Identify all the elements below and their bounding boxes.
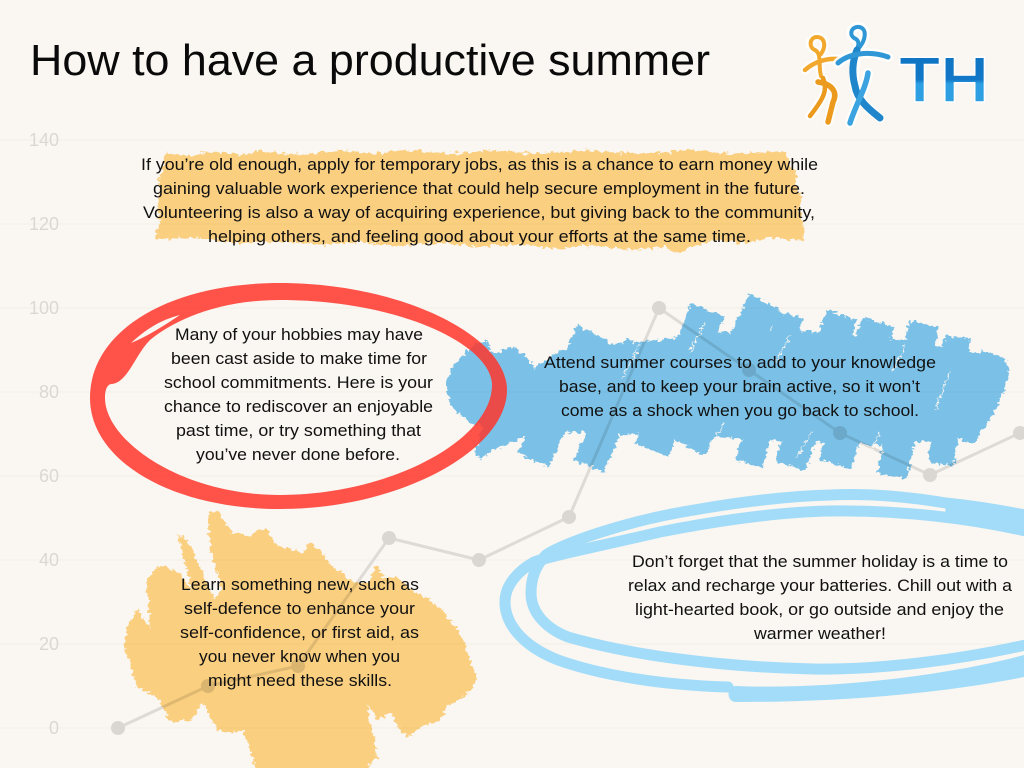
- light blue hand-drawn loops: [505, 494, 1024, 702]
- text: self-defence to enhance your: [184, 599, 415, 618]
- text: base, and to keep your brain active, so it won’t: [559, 377, 920, 396]
- logo letters TH: TH: [899, 43, 989, 116]
- text: Volunteering is also a way of acquiring experience, but giving back to the community,: [143, 203, 815, 222]
- text: gaining valuable work experience that could help secure employment in the future.: [153, 179, 805, 198]
- text: [628, 552, 1013, 643]
- panel: temporary jobs and volunteering: [141, 150, 818, 253]
- text: school commitments. Here is your: [164, 373, 433, 392]
- text: chance to rediscover an enjoyable: [164, 397, 433, 416]
- text: been cast aside to make time for: [171, 349, 427, 368]
- text: might need these skills.: [208, 671, 392, 690]
- logo: TH dancing figures: [805, 27, 989, 123]
- text: past time, or try something that: [176, 421, 421, 440]
- background line chart: 140: [29, 130, 59, 150]
- background line chart: 40: [39, 550, 59, 570]
- background line chart: 120: [29, 214, 59, 234]
- text: [180, 575, 419, 690]
- background line chart: 80: [39, 382, 59, 402]
- brush slits: [622, 322, 950, 462]
- background line chart: 20: [39, 634, 59, 654]
- text: [141, 155, 818, 246]
- text: If you’re old enough, apply for temporary jobs, as this is a chance to earn money while: [141, 155, 818, 174]
- title: How to have a productive summer: [30, 36, 710, 85]
- background line chart: 100: [29, 298, 59, 318]
- text: Many of your hobbies may have: [175, 325, 423, 344]
- background line chart: 60: [39, 466, 59, 486]
- text: light-hearted book, or go outside and enjoy the: [635, 600, 1004, 619]
- icon: blue figure: [838, 27, 888, 123]
- text: you never know when you: [199, 647, 400, 666]
- text: [164, 325, 433, 464]
- text: [544, 353, 936, 420]
- text: self-confidence, or first aid, as: [180, 623, 419, 642]
- background line chart: 0: [49, 718, 59, 738]
- brush: yellow band: [155, 150, 804, 253]
- panel: relax and recharge: [505, 494, 1024, 702]
- background line chart: [0, 130, 1024, 738]
- text: relax and recharge your batteries. Chill out with a: [628, 576, 1013, 595]
- icon: orange figure: [805, 37, 838, 122]
- text: warmer weather!: [753, 624, 886, 643]
- brush: yellow blob: [123, 511, 477, 768]
- panel: hobbies: [90, 283, 507, 509]
- text: you’ve never done before.: [196, 445, 400, 464]
- red hand-drawn ring: [90, 283, 507, 509]
- brush slit: [131, 315, 180, 343]
- panel: summer courses: [447, 302, 1010, 476]
- text: helping others, and feeling good about your efforts at the same time.: [208, 227, 751, 246]
- text: Attend summer courses to add to your knowledge: [544, 353, 936, 372]
- brush: blue scribble: [447, 302, 1010, 476]
- text: Don’t forget that the summer holiday is a time to: [632, 552, 1008, 571]
- text: Learn something new, such as: [181, 575, 419, 594]
- panel: learn something new: [123, 511, 477, 768]
- text: come as a shock when you go back to school.: [561, 401, 919, 420]
